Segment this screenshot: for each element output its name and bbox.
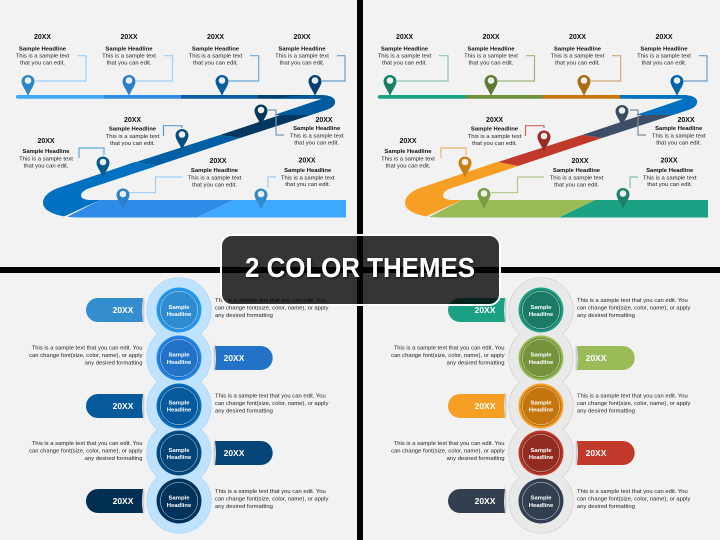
node 4: Headline	[167, 455, 192, 461]
text block 2	[29, 346, 143, 366]
text block 5: can change font(size, color, name), or apply	[215, 496, 328, 502]
label 9: that you can edit.	[647, 182, 692, 188]
label 6: that you can edit.	[110, 141, 155, 147]
label 5	[290, 117, 344, 147]
text block 2	[391, 346, 505, 366]
text block 1	[577, 298, 690, 319]
text block 4: any desired formatting	[447, 456, 504, 462]
text block 4: This is a sample text that you can edit. You	[32, 441, 142, 447]
label 8: that you can edit.	[192, 182, 237, 188]
text block 3: can change font(size, color, name), or apply	[577, 401, 690, 407]
label 7: This is a sample text	[19, 156, 73, 162]
text block 1: This is a sample text that you can edit. You	[215, 298, 326, 304]
pin 8	[116, 188, 130, 210]
label 2: 20XX	[482, 34, 500, 41]
node 5: Sample	[531, 496, 552, 502]
text block 1: any desired formatting	[577, 313, 635, 319]
node 1	[156, 288, 202, 332]
text block 5	[577, 489, 690, 510]
label 5: that you can edit.	[656, 141, 701, 147]
label 2: Sample Headline	[105, 46, 153, 52]
label 2	[464, 34, 518, 67]
node 4: Headline	[529, 455, 554, 461]
panel: multicolor road timeline	[362, 0, 720, 267]
node 3: Sample	[169, 400, 190, 406]
year pill 5: 20XX	[113, 496, 134, 506]
text block 5: This is a sample text that you can edit. You	[215, 489, 326, 495]
year pill 3: 20XX	[113, 401, 134, 411]
node 3	[518, 384, 564, 428]
label 3: that you can edit.	[193, 61, 238, 67]
label 2	[102, 34, 156, 67]
text block 4: can change font(size, color, name), or apply	[391, 448, 505, 454]
label 4: that you can edit.	[280, 61, 325, 67]
label 4	[275, 34, 329, 67]
text block 3: This is a sample text that you can edit. You	[577, 394, 688, 400]
text block 2: any desired formatting	[85, 360, 142, 366]
label 9: Sample Headline	[646, 168, 694, 174]
text block 3: can change font(size, color, name), or apply	[215, 401, 328, 407]
label 1: that you can edit.	[382, 61, 427, 67]
label 7: Sample Headline	[384, 149, 432, 155]
label 6	[106, 117, 160, 147]
node 1: Sample	[531, 305, 552, 311]
label 9	[281, 158, 335, 188]
node 1: Sample	[169, 305, 190, 311]
label 8: Sample Headline	[553, 168, 601, 174]
pin 4	[670, 75, 684, 96]
label 1: 20XX	[34, 34, 51, 41]
label 1: that you can edit.	[20, 61, 65, 67]
text block 3: any desired formatting	[577, 409, 635, 415]
text block 2: This is a sample text that you can edit. You	[32, 346, 142, 352]
label 3: that you can edit.	[555, 61, 600, 67]
label 9: 20XX	[660, 158, 678, 164]
pin 9	[616, 188, 630, 209]
label 9: 20XX	[298, 158, 316, 164]
year pill 1	[86, 298, 144, 322]
pin 6	[538, 130, 550, 152]
pin 7	[458, 156, 472, 178]
label 5: This is a sample text	[652, 134, 706, 140]
label 8	[188, 158, 242, 188]
label 8: Sample Headline	[191, 168, 239, 174]
label 5: This is a sample text	[290, 134, 344, 140]
label 3: Sample Headline	[554, 46, 602, 52]
year pill 4: 20XX	[586, 448, 607, 458]
label 6: that you can edit.	[472, 141, 517, 147]
label 6: Sample Headline	[109, 127, 157, 133]
banner: 2 color themes	[221, 235, 500, 305]
label 7	[19, 138, 73, 170]
label 8: This is a sample text	[550, 175, 604, 181]
pin 4	[308, 75, 322, 96]
label 7	[381, 138, 435, 170]
node 5: Headline	[529, 503, 554, 509]
label 1: Sample Headline	[19, 46, 67, 52]
node 5	[156, 478, 202, 524]
label 6: This is a sample text	[106, 134, 160, 140]
label 3: Sample Headline	[192, 46, 240, 52]
node 1	[518, 288, 564, 332]
banner title: 2 COLOR THEMES	[245, 252, 475, 283]
text block 2: any desired formatting	[447, 360, 504, 366]
pin 2	[484, 75, 498, 96]
pin 9	[254, 188, 268, 210]
node 2: Headline	[167, 360, 192, 366]
label 6: 20XX	[486, 117, 503, 124]
text block 4: any desired formatting	[85, 456, 142, 462]
pin 7	[96, 156, 110, 178]
label 5: 20XX	[315, 117, 333, 124]
node 2: Headline	[529, 360, 554, 366]
text block 1: can change font(size, color, name), or apply	[215, 306, 328, 312]
label 2: This is a sample text	[102, 54, 156, 60]
road: blue segments	[16, 95, 346, 218]
label 3	[189, 34, 243, 67]
text block 3: This is a sample text that you can edit. You	[215, 394, 326, 400]
label 2: Sample Headline	[467, 46, 515, 52]
node 1: Headline	[167, 312, 192, 318]
text block 5: any desired formatting	[215, 504, 273, 510]
label 8: 20XX	[571, 158, 589, 165]
node 4	[518, 430, 564, 476]
year pill 2	[214, 346, 273, 370]
node 3: Headline	[167, 408, 192, 414]
label 2: that you can edit.	[469, 61, 514, 67]
label 4	[637, 34, 691, 67]
node 4: Sample	[169, 448, 190, 454]
label 5: that you can edit.	[294, 141, 339, 147]
panel: blue road timeline	[0, 0, 357, 267]
connector lines	[35, 56, 345, 193]
year pill 4	[576, 441, 635, 465]
pin 1	[384, 75, 396, 96]
text block 1	[215, 298, 328, 319]
label 4: Sample Headline	[640, 46, 688, 52]
text block 5: can change font(size, color, name), or apply	[577, 496, 690, 502]
year pill 4	[214, 441, 273, 465]
label 9: This is a sample text	[281, 175, 335, 181]
pin 5	[254, 104, 268, 126]
label 1	[378, 34, 432, 67]
year pill 5	[86, 489, 144, 513]
node 2	[518, 336, 564, 380]
year pill 1: 20XX	[113, 305, 134, 315]
text block 3	[215, 394, 328, 415]
label 7: that you can edit.	[24, 164, 69, 170]
pin 3	[216, 75, 228, 96]
node 2: Sample	[531, 353, 552, 359]
label 3: 20XX	[207, 34, 224, 41]
label 2: This is a sample text	[464, 54, 518, 60]
node 2	[156, 336, 202, 380]
label 9: Sample Headline	[284, 168, 332, 174]
pin 2	[122, 75, 136, 96]
label 3: This is a sample text	[551, 54, 605, 60]
label 3: 20XX	[569, 34, 586, 41]
label 5: 20XX	[677, 117, 695, 124]
year pill 5: 20XX	[475, 496, 496, 506]
text block 2: can change font(size, color, name), or apply	[29, 353, 143, 359]
label 7: Sample Headline	[22, 149, 70, 155]
text block 1: can change font(size, color, name), or apply	[577, 306, 690, 312]
label 1: This is a sample text	[16, 54, 70, 60]
label 5	[652, 117, 706, 147]
text block 3: any desired formatting	[215, 409, 273, 415]
label 4: Sample Headline	[278, 46, 326, 52]
label 6: This is a sample text	[468, 134, 522, 140]
road: multicolor segments	[378, 95, 708, 218]
text block 1: any desired formatting	[215, 313, 273, 319]
text block 2: This is a sample text that you can edit. You	[394, 346, 504, 352]
label 7: This is a sample text	[381, 156, 435, 162]
pin 3	[578, 75, 590, 96]
text block 4: This is a sample text that you can edit. You	[394, 441, 504, 447]
text block 4	[29, 441, 143, 462]
node 4	[156, 430, 202, 476]
pin 1	[22, 75, 34, 96]
year pill 5	[448, 489, 506, 513]
year pill 2	[576, 346, 635, 370]
outer circle chain	[509, 278, 573, 533]
pin 6	[176, 129, 188, 150]
label 9: This is a sample text	[643, 175, 697, 181]
label 4: 20XX	[655, 34, 673, 41]
panel: multicolor circle chain	[363, 273, 720, 540]
node 2: Sample	[169, 353, 190, 359]
label 1: This is a sample text	[378, 54, 432, 60]
text block 3	[577, 394, 690, 415]
node 3	[156, 384, 202, 428]
text block 5: This is a sample text that you can edit. You	[577, 489, 688, 495]
text block 4	[391, 441, 505, 462]
label 2: 20XX	[120, 34, 138, 41]
label 3	[551, 34, 605, 67]
text block 1: This is a sample text that you can edit. You	[577, 298, 688, 304]
label 6	[468, 117, 522, 147]
text block 4: can change font(size, color, name), or apply	[29, 448, 143, 454]
year pill 2: 20XX	[586, 353, 607, 363]
year pill 1: 20XX	[475, 305, 496, 315]
year pill 3	[448, 394, 506, 418]
text block 2: can change font(size, color, name), or apply	[391, 353, 505, 359]
label 1: 20XX	[396, 34, 413, 41]
label 6: Sample Headline	[471, 127, 519, 133]
label 5: Sample Headline	[655, 126, 703, 132]
label 1	[16, 34, 70, 67]
label 7: 20XX	[37, 138, 55, 145]
connector lines	[397, 56, 707, 193]
label 4: that you can edit.	[642, 61, 687, 67]
label 4: 20XX	[293, 34, 311, 41]
outer circle chain	[147, 278, 211, 533]
year pill 1	[448, 298, 506, 322]
label 4: This is a sample text	[275, 54, 329, 60]
label 6: 20XX	[124, 117, 141, 124]
label 8: This is a sample text	[188, 175, 242, 181]
text block 5: any desired formatting	[577, 504, 635, 510]
node 4: Sample	[531, 448, 552, 454]
node 3: Sample	[531, 400, 552, 406]
text block 5	[215, 489, 328, 510]
year pill 2: 20XX	[224, 353, 245, 363]
year pill 3: 20XX	[475, 401, 496, 411]
label 8	[550, 158, 604, 188]
label 4: This is a sample text	[637, 54, 691, 60]
year pill 3	[86, 394, 144, 418]
label 9: that you can edit.	[285, 182, 330, 188]
label 9	[643, 158, 697, 188]
label 7: 20XX	[399, 138, 417, 145]
label 3: This is a sample text	[189, 54, 243, 60]
year pill 4: 20XX	[224, 448, 245, 458]
node 5	[518, 478, 564, 524]
label 1: Sample Headline	[381, 46, 429, 52]
node 5: Headline	[167, 503, 192, 509]
node 3: Headline	[529, 408, 554, 414]
label 8: that you can edit.	[554, 182, 599, 188]
pin 8	[478, 188, 490, 209]
panel: blue circle chain	[0, 273, 357, 540]
label 8: 20XX	[209, 158, 227, 165]
label 2: that you can edit.	[107, 61, 152, 67]
label 7: that you can edit.	[386, 164, 431, 170]
node 5: Sample	[169, 496, 190, 502]
node 1: Headline	[529, 312, 554, 318]
pin 5	[616, 105, 628, 126]
label 5: Sample Headline	[293, 126, 341, 132]
